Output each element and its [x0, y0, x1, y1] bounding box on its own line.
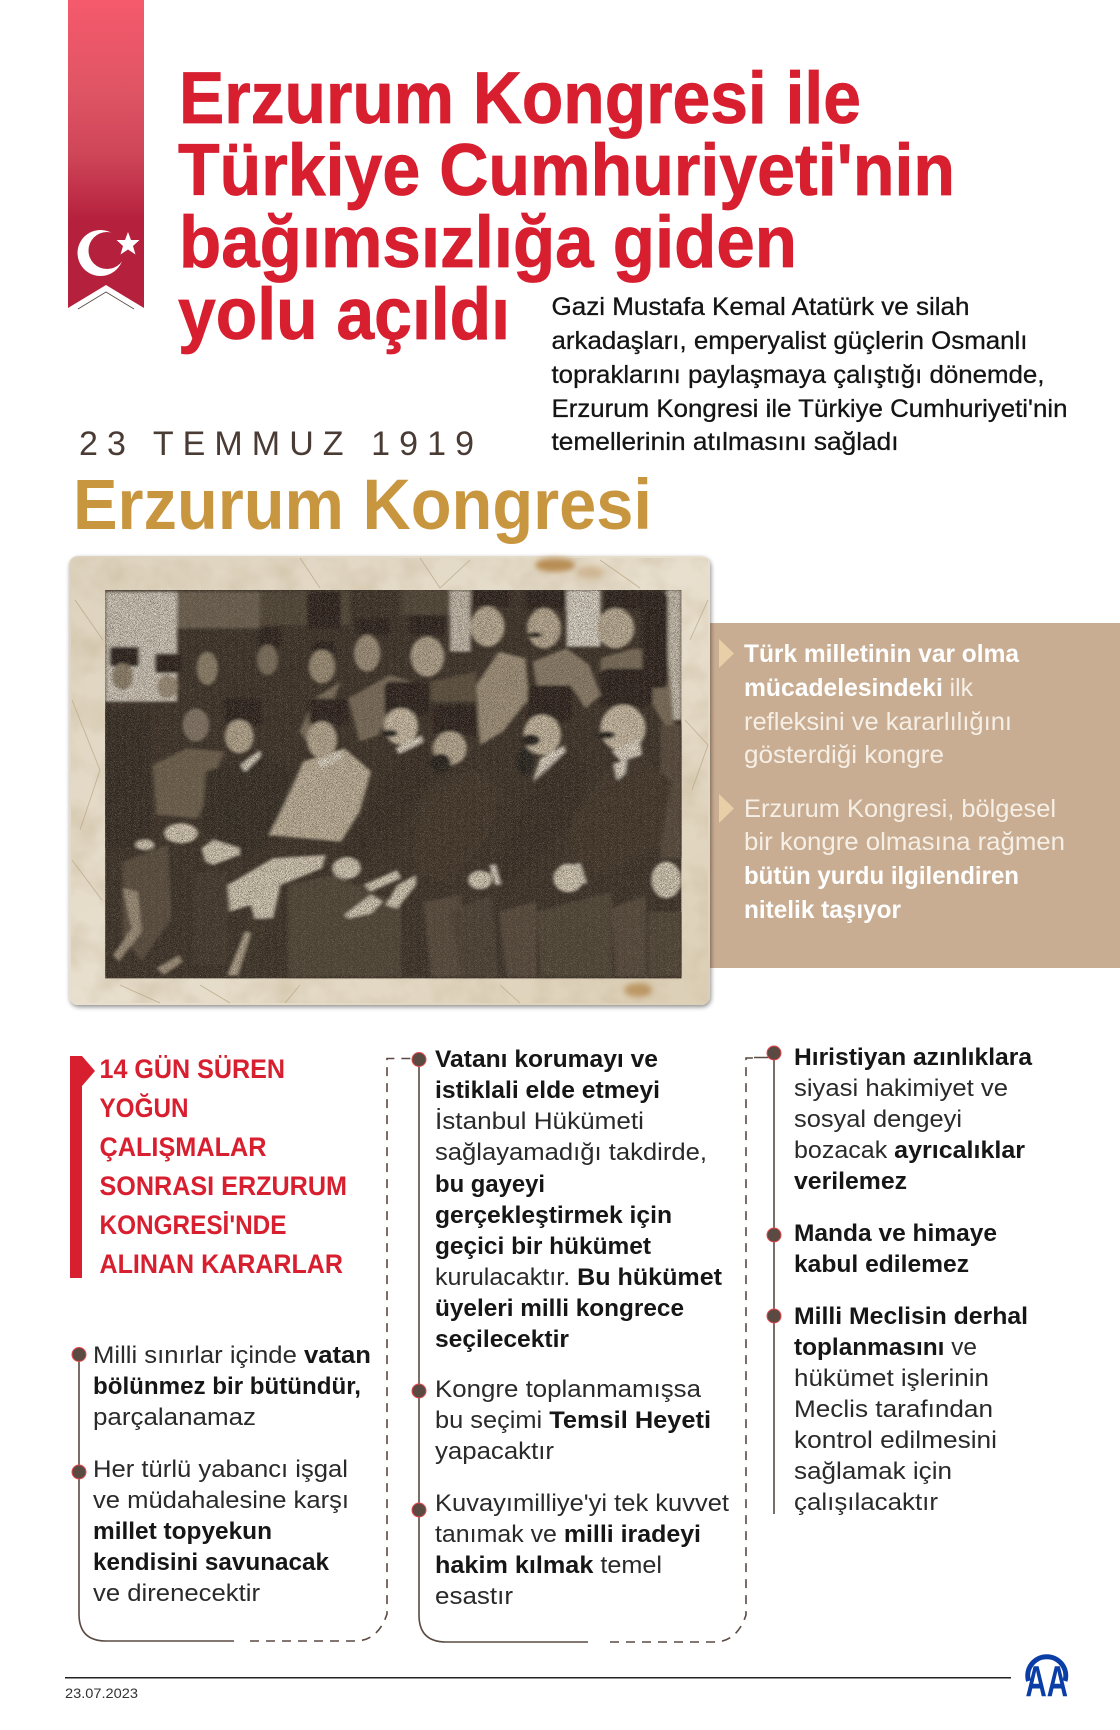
column two: decisions: esastır	[435, 1583, 513, 1610]
icon: arrow two	[719, 794, 734, 823]
icon: crescent and star	[78, 230, 140, 276]
column two: decisions: geçici bir hükümet	[435, 1233, 651, 1260]
panel: tan facts: mücadelesindeki ilk	[744, 674, 973, 702]
panel: decisions heading: SONRASI ERZURUM	[100, 1171, 347, 1201]
bullet three	[767, 1309, 781, 1323]
central light suit	[269, 748, 371, 842]
column one: decisions: Her türlü yabancı işgal	[93, 1456, 348, 1483]
panel: decisions heading: 14 GÜN SÜREN	[100, 1054, 285, 1084]
panel: decisions heading: KONGRESİ'NDE	[100, 1210, 286, 1240]
panel: tan facts: bütün yurdu ilgilendiren	[744, 862, 1019, 890]
bullet one	[72, 1348, 86, 1362]
column two: decisions: bu gayeyi	[435, 1171, 545, 1198]
title: Türkiye Cumhuriyeti'nin	[178, 130, 955, 211]
column one: decisions	[72, 1342, 371, 1607]
column two: decisions: Kuvayımilliye'yi tek kuvvet	[435, 1490, 729, 1517]
column three: decisions: toplanmasını ve	[794, 1334, 977, 1361]
paper creases	[72, 558, 708, 1003]
moustaches and beards	[381, 632, 616, 776]
icon: arrow one	[719, 639, 734, 668]
column three: decisions: kabul edilemez	[794, 1251, 969, 1278]
photo card	[69, 556, 710, 1005]
intro paragraph: topraklarını paylaşmaya çalıştığı dönemde,	[552, 361, 1044, 389]
column one: decisions: ve müdahalesine karşı	[93, 1487, 349, 1514]
panel: decisions heading	[70, 1054, 347, 1279]
column two: decisions: Kongre toplanmamışsa	[435, 1376, 701, 1403]
column three: decisions: çalışılacaktır	[794, 1489, 938, 1516]
column one: decisions: kendisini savunacak	[93, 1549, 329, 1576]
connector: column two to three	[419, 1053, 774, 1642]
bullet one	[767, 1046, 781, 1060]
intro paragraph: arkadaşları, emperyalist güçlerin Osmanlı	[552, 327, 1028, 355]
bullet one	[412, 1052, 426, 1066]
column three: decisions: verilemez	[794, 1168, 907, 1195]
column three: decisions: Milli Meclisin derhal	[794, 1303, 1028, 1330]
fezzes and caps	[109, 590, 668, 735]
panel: decisions heading: ÇALIŞMALAR	[100, 1132, 266, 1162]
column one: decisions: Milli sınırlar içinde vatan	[93, 1342, 371, 1369]
column three: decisions: kontrol edilmesini	[794, 1427, 997, 1454]
title: bağımsızlığa giden	[179, 202, 797, 283]
column two: decisions	[412, 1046, 729, 1610]
panel: tan facts: nitelik taşıyor	[744, 896, 901, 924]
footer rule	[65, 1677, 1011, 1678]
column one: decisions: ve direnecektir	[93, 1580, 260, 1607]
column two: decisions: gerçekleştirmek için	[435, 1202, 672, 1229]
column three: decisions: Meclis tarafından	[794, 1396, 993, 1423]
column two: decisions: kurulacaktır. Bu hükümet	[435, 1264, 722, 1291]
mid tone lower garments	[288, 875, 401, 977]
column three: decisions: bozacak ayrıcalıklar	[794, 1137, 1025, 1164]
column three: decisions: Manda ve himaye	[794, 1220, 997, 1247]
column two: decisions: üyeleri milli kongrece	[435, 1295, 684, 1322]
column two: decisions: tanımak ve milli iradeyi	[435, 1521, 701, 1548]
panel: tan facts: refleksini ve kararlılığını	[744, 708, 1012, 736]
column two: decisions: istiklali elde etmeyi	[435, 1077, 660, 1104]
column two: decisions: İstanbul Hükümeti	[435, 1108, 644, 1135]
hands	[136, 823, 681, 918]
suits	[202, 752, 292, 858]
title	[178, 58, 955, 355]
footer date: 23.07.2023	[65, 1686, 138, 1701]
column one: decisions: parçalanamaz	[93, 1404, 256, 1431]
column two: decisions: Vatanı korumayı ve	[435, 1046, 658, 1073]
column two: decisions: seçilecektir	[435, 1326, 569, 1353]
intro paragraph: Erzurum Kongresi ile Türkiye Cumhuriyeti'nin	[552, 395, 1068, 423]
column one: decisions: bölünmez bir bütündür,	[93, 1373, 361, 1400]
congress heading: Erzurum Kongresi	[73, 466, 652, 545]
column three: decisions: sağlamak için	[794, 1458, 952, 1485]
bullet two	[72, 1465, 86, 1479]
intro paragraph: Gazi Mustafa Kemal Atatürk ve silah	[552, 293, 970, 321]
faces	[597, 608, 634, 648]
column three: decisions: hükümet işlerinin	[794, 1365, 989, 1392]
panel: tan facts: Erzurum Kongresi, bölgesel	[744, 795, 1056, 823]
panel: tan facts	[706, 623, 1120, 968]
icon: red flag bar	[70, 1056, 95, 1278]
date heading: 23 TEMMUZ 1919	[79, 425, 474, 463]
column three: decisions: siyasi hakimiyet ve	[794, 1075, 1008, 1102]
panel: tan facts: Türk milletinin var olma	[744, 640, 1020, 668]
ribbon with crescent and star	[68, 0, 144, 309]
bullet three	[412, 1503, 426, 1517]
column two: decisions: sağlayamadığı takdirde,	[435, 1139, 707, 1166]
column three: decisions: Hıristiyan azınlıklara	[794, 1044, 1032, 1071]
connector: column one to two	[79, 1058, 418, 1641]
intro paragraph	[552, 293, 1068, 456]
column two: decisions: yapacaktır	[435, 1438, 554, 1465]
title: Erzurum Kongresi ile	[179, 58, 861, 139]
column one: decisions: millet topyekun	[93, 1518, 272, 1545]
intro paragraph: temellerinin atılmasını sağladı	[552, 428, 898, 456]
panel: decisions heading: ALINAN KARARLAR	[100, 1249, 343, 1279]
panel: tan facts: bir kongre olmasına rağmen	[744, 828, 1065, 856]
column two: decisions: hakim kılmak temel	[435, 1552, 662, 1579]
historic group photograph	[105, 590, 681, 978]
standing officers coats	[476, 652, 529, 745]
sky and wall	[105, 592, 177, 702]
title: yolu açıldı	[178, 274, 510, 355]
bullet two	[767, 1228, 781, 1242]
column two: decisions: bu seçimi Temsil Heyeti	[435, 1407, 711, 1434]
icon: agency logo	[1026, 1657, 1068, 1706]
column three: decisions	[767, 1044, 1032, 1516]
icon: agency logo: AA	[1026, 1657, 1068, 1706]
panel: decisions heading: YOĞUN	[100, 1092, 188, 1123]
bullet two	[412, 1384, 426, 1398]
collars	[241, 735, 642, 885]
column three: decisions: sosyal dengeyi	[794, 1106, 962, 1133]
panel: tan facts: gösterdiği kongre	[744, 741, 944, 769]
